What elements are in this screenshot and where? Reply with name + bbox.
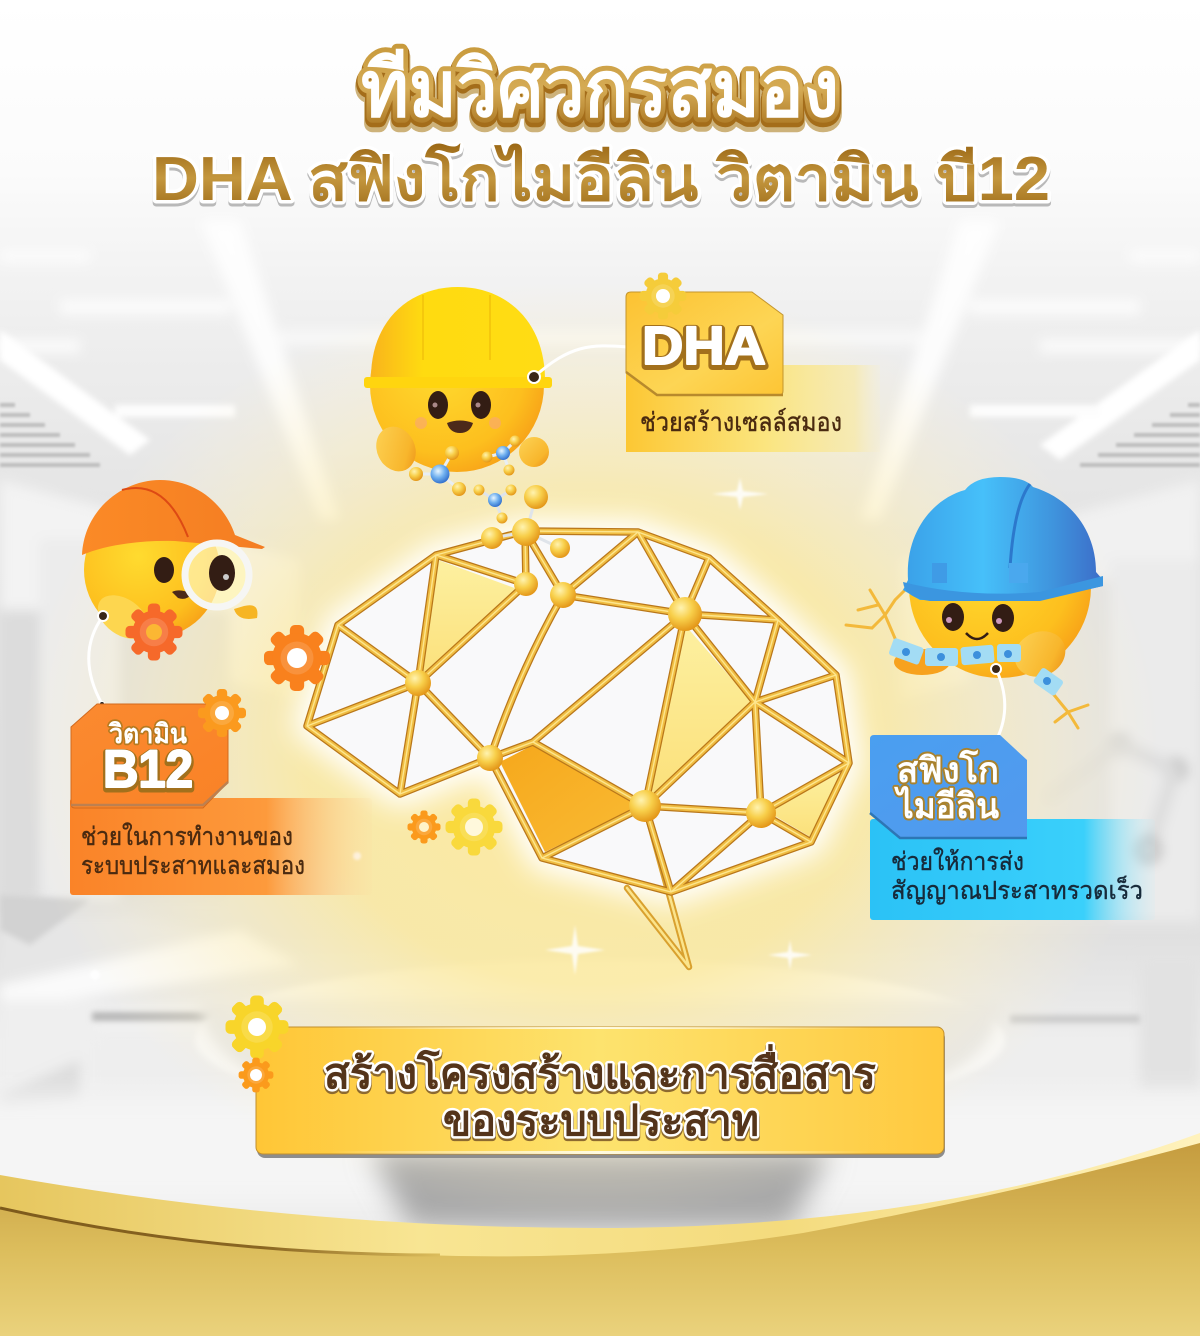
description	[81, 822, 305, 880]
face	[909, 496, 1091, 678]
description: ช่วยให้การส่ง	[891, 847, 1024, 876]
warm glow behind brain	[20, 280, 1160, 1220]
eye	[154, 557, 174, 583]
banner text: ของระบบประสาท	[443, 1099, 759, 1146]
brain halo	[307, 531, 849, 892]
badge label: DHA	[642, 318, 766, 378]
gear	[640, 273, 686, 319]
face	[370, 298, 544, 472]
face	[84, 502, 220, 638]
helmet	[371, 287, 545, 378]
callout: vitamin B12	[70, 689, 372, 895]
gear	[126, 604, 182, 660]
title	[152, 45, 1050, 217]
description: สัญญาณประสาทรวดเร็ว	[891, 875, 1143, 905]
myelin chain	[888, 637, 1064, 697]
title line 1: ทีมวิศวกรสมอง	[361, 45, 839, 133]
badge label	[893, 749, 999, 826]
badge label: ไมอีลิน	[893, 785, 999, 826]
badge label: วิตามิน	[108, 719, 187, 749]
left hand	[894, 649, 950, 675]
magnifier	[185, 543, 249, 607]
eyes	[942, 603, 964, 631]
character: vitamin B12 engineer (orange helmet)	[82, 480, 265, 660]
mouth	[447, 420, 473, 433]
hands	[369, 420, 423, 478]
brain interior	[307, 531, 849, 892]
sparkles	[90, 478, 812, 980]
banner text: ของระบบประสาท	[443, 1097, 759, 1144]
title line 1: ทีมวิศวกรสมอง	[361, 52, 839, 140]
panel	[870, 819, 1155, 920]
description: ระบบประสาทและสมอง	[81, 852, 305, 880]
hand	[90, 586, 156, 648]
character: sphingomyelin engineer (blue helmet)	[846, 477, 1103, 728]
connector: DHA	[528, 344, 630, 383]
callout: sphingomyelin	[870, 735, 1155, 920]
banner text	[324, 1044, 876, 1146]
molecule cluster above brain	[474, 484, 570, 558]
wire struts mid	[307, 531, 849, 892]
panel	[70, 798, 372, 895]
wire struts shadow	[307, 531, 849, 892]
nodes	[405, 572, 776, 828]
callout: DHA	[626, 273, 880, 452]
helmet	[82, 480, 265, 555]
tail	[627, 806, 689, 967]
title line 2: DHA สฟิงโกไมอีลิน วิตามิน บี12	[152, 142, 1050, 214]
eyes	[428, 391, 448, 419]
dendrites	[846, 590, 1088, 728]
wire struts highlight	[307, 531, 849, 892]
banner text: สร้างโครงสร้างและการสื่อสาร	[324, 1046, 876, 1099]
badge	[71, 704, 228, 808]
banner text: สร้างโครงสร้างและการสื่อสาร	[324, 1044, 876, 1097]
smile	[966, 633, 988, 639]
character: DHA engineer (yellow helmet)	[364, 287, 552, 478]
molecules held by DHA engineer	[409, 436, 520, 496]
brain: wireframe in gold	[307, 531, 849, 967]
banner: summary	[226, 996, 945, 1158]
title line 1: ทีมวิศวกรสมอง	[361, 48, 839, 136]
title line 2: DHA สฟิงโกไมอีลิน วิตามิน บี12	[152, 145, 1050, 217]
helmet	[903, 477, 1103, 600]
badge label: DHA	[642, 316, 766, 376]
connector: B12	[89, 611, 108, 706]
gear	[198, 689, 246, 737]
callout: vitamin B12: B12	[103, 740, 193, 799]
badge label: สฟิงโก	[897, 749, 999, 790]
panel	[626, 365, 880, 452]
badge	[626, 292, 783, 395]
description	[891, 847, 1143, 905]
gears on banner	[226, 996, 288, 1058]
description: ช่วยในการทำงานของ	[81, 822, 293, 851]
badge	[870, 735, 1027, 839]
coloured facets	[420, 560, 845, 852]
gear cluster near brain	[264, 625, 502, 856]
callout: vitamin B12: B12	[103, 742, 193, 801]
hand	[1007, 623, 1073, 685]
connector: sphingomyelin	[991, 664, 1005, 742]
bottom gold swoosh	[0, 1133, 1200, 1336]
louvre vents	[0, 405, 1200, 465]
description: ช่วยสร้างเซลล์สมอง	[640, 407, 842, 437]
